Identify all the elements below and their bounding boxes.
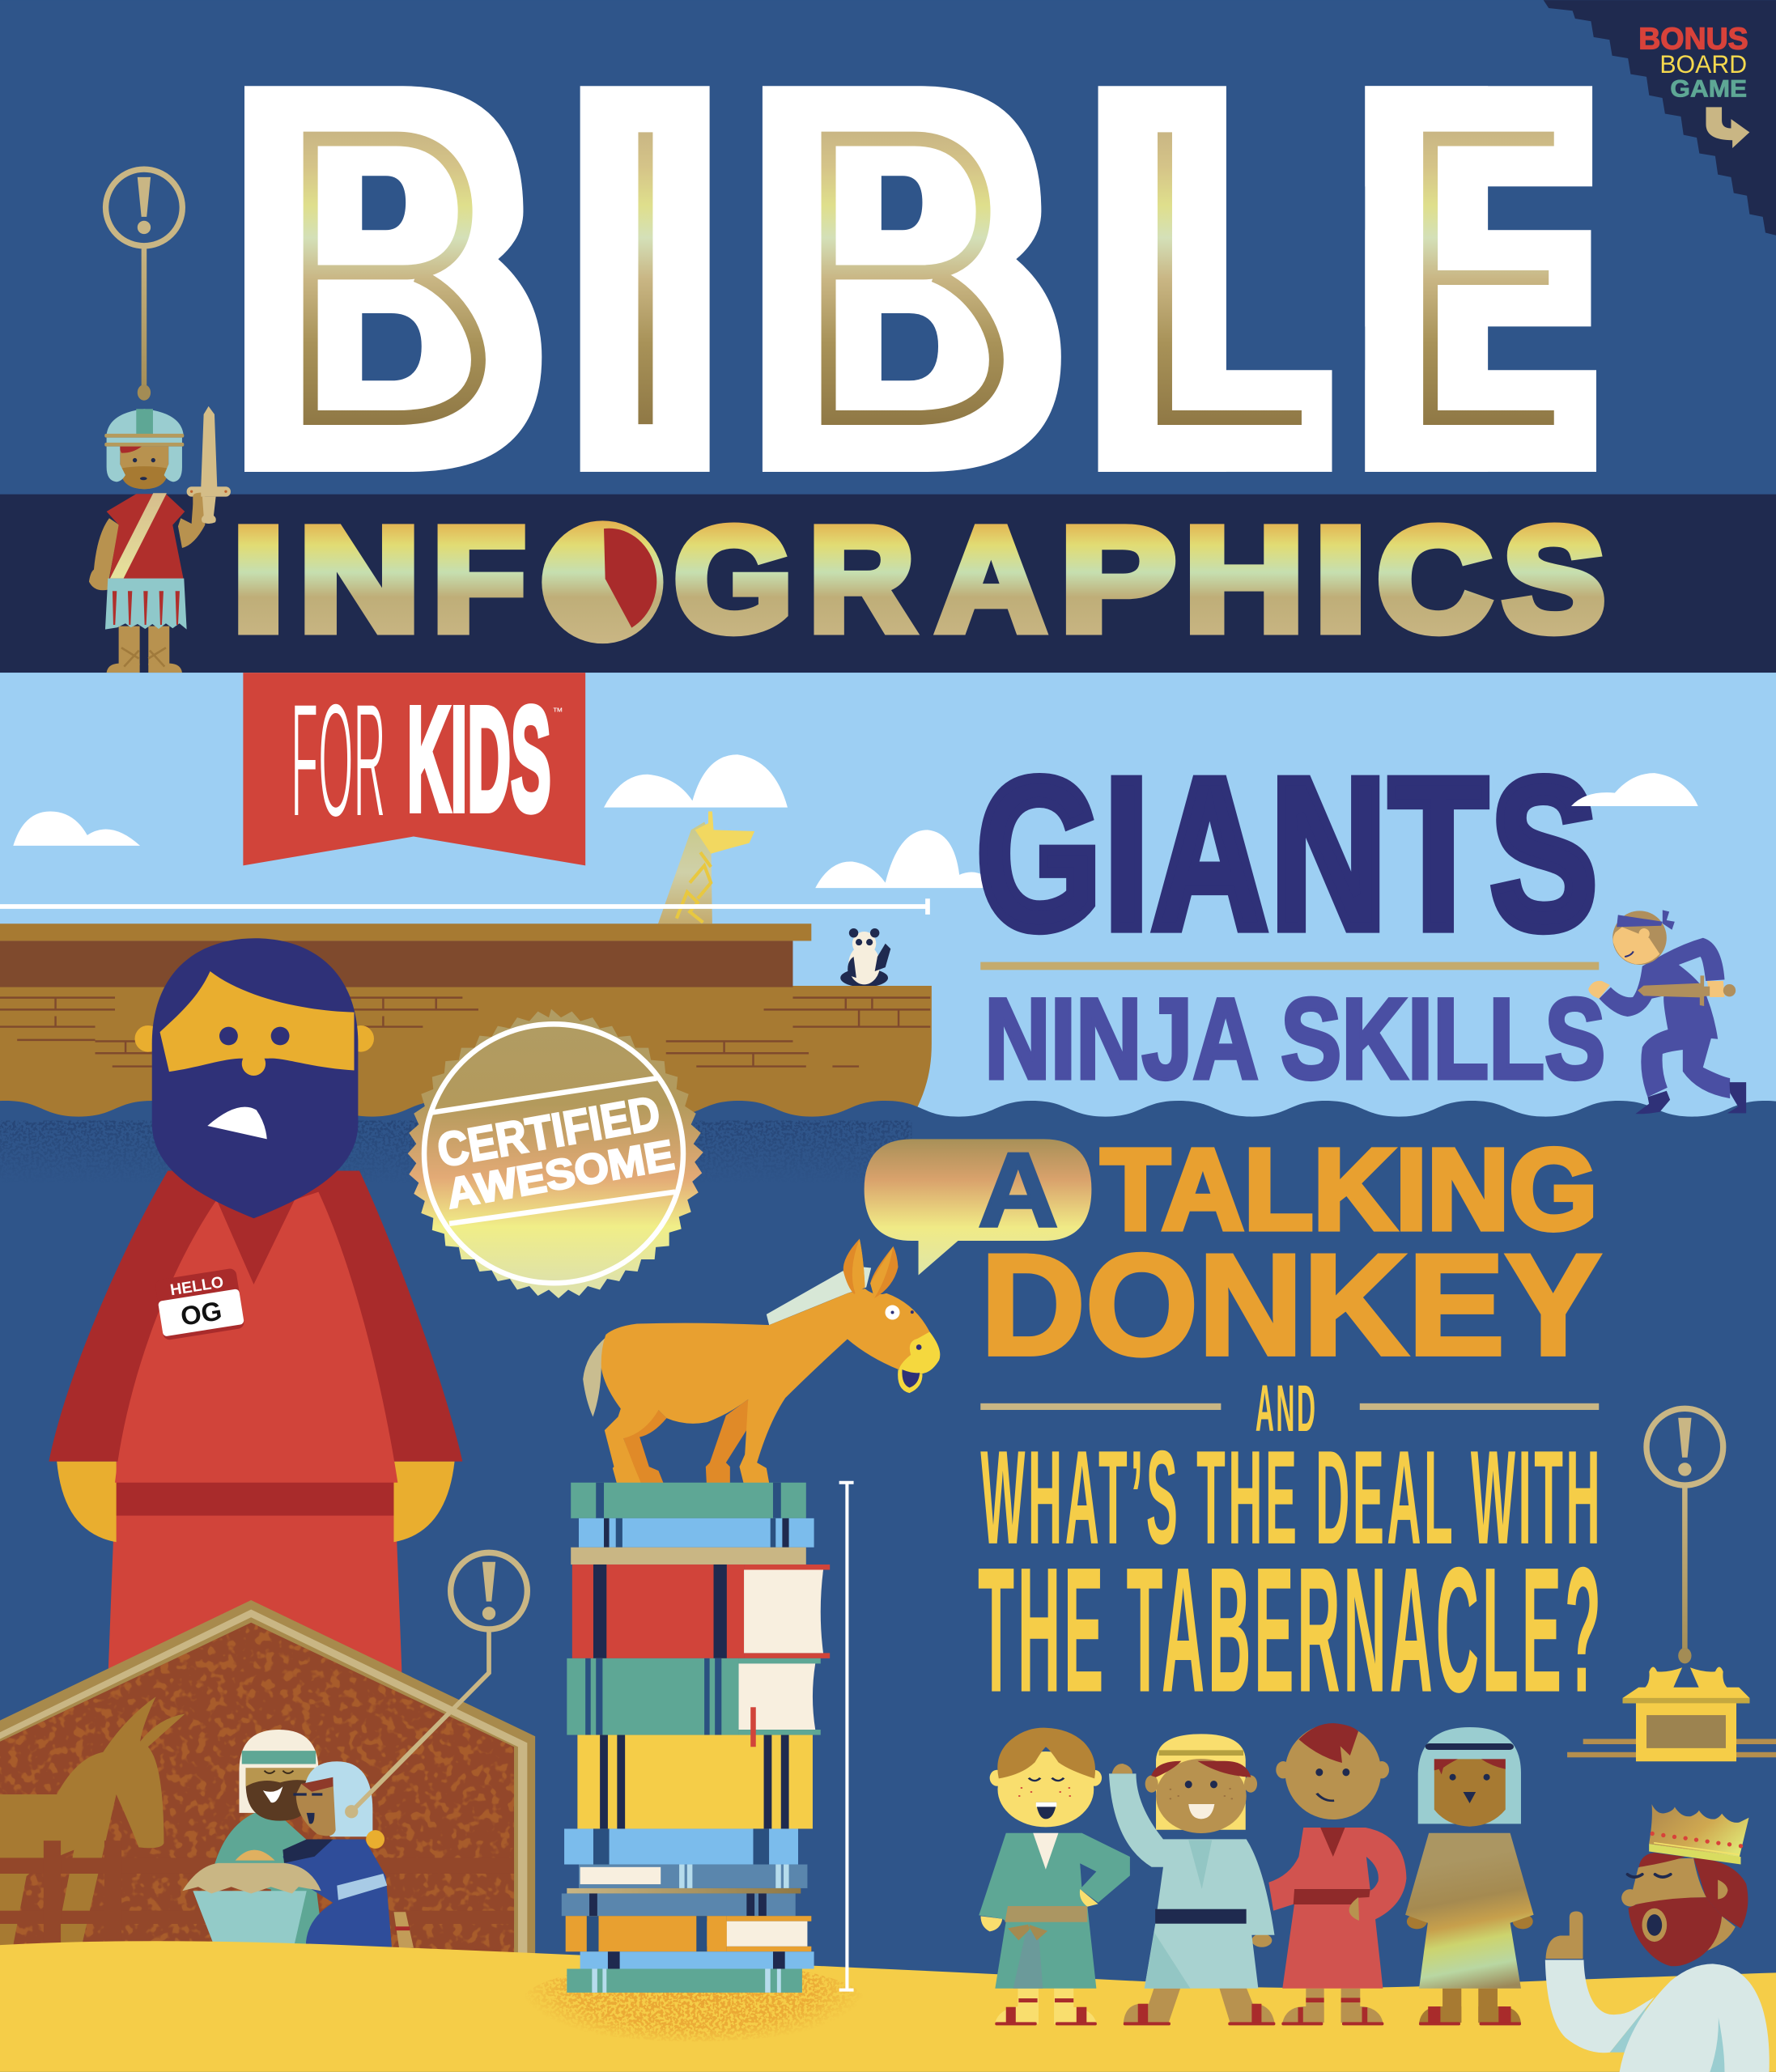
book 7 blue (564, 1828, 798, 1865)
speech bubble with A (865, 1131, 1091, 1275)
fence (0, 1841, 514, 1959)
cloud over giants (1571, 773, 1698, 806)
book 3 tan (571, 1548, 806, 1565)
for kids ribbon: FOR (291, 669, 386, 851)
title: BIBLE: L (1077, 0, 1335, 575)
water (0, 1101, 1776, 2072)
badge: certified awesome (408, 1009, 703, 1298)
icon: exclamation marker middle with pointer (345, 1552, 527, 1818)
sleeves (49, 1171, 462, 1462)
title: INFOGRAPHICS: H (1184, 496, 1304, 662)
book 11 orange (566, 1916, 811, 1951)
corner banner: bonus board game (1544, 0, 1776, 236)
title: INFOGRAPHICS: I (232, 496, 286, 662)
heading: what's the deal with the tabernacle (978, 1423, 1604, 1730)
stable (0, 1600, 535, 1969)
icon: pie chart letter O (542, 520, 663, 643)
panda (840, 928, 890, 987)
heading: talking donkey: DONKEY (980, 1224, 1602, 1385)
gold rule (980, 962, 1599, 970)
corner banner: bonus board game: BONUS (1638, 22, 1748, 56)
speech bubble with A: A (978, 1131, 1059, 1249)
donkey (583, 1239, 940, 1483)
name tag (155, 1267, 245, 1340)
giraffe (658, 811, 754, 923)
beard and hair (152, 938, 358, 1218)
corner banner: bonus board game: GAME (1670, 75, 1747, 102)
king (1545, 1804, 1770, 2072)
robe lower (108, 1462, 402, 1757)
book 10 steel (562, 1893, 796, 1916)
measuring line above ark (0, 898, 928, 915)
kid: gold robe (1405, 1727, 1534, 2025)
kid: red robe (1268, 1723, 1406, 2025)
icon: exclamation marker right (1646, 1408, 1723, 1663)
corner banner: bonus board game: BOARD (1659, 50, 1747, 79)
name tag: OG (179, 1295, 223, 1331)
book 2 blue (579, 1518, 814, 1548)
icon: corner arrow (1706, 107, 1749, 148)
group of four kids (979, 1723, 1534, 2025)
book 5 green (567, 1658, 821, 1735)
title: BIBLE (221, 0, 1603, 575)
donkey silhouette (0, 1696, 185, 1945)
badge: certified awesome: AWESOME (443, 1132, 678, 1218)
for kids ribbon: ™ (552, 705, 563, 717)
book 4 red (572, 1565, 830, 1658)
ark of the covenant (1567, 1667, 1776, 1761)
sand (0, 1941, 1776, 2072)
title: INFOGRAPHICS: P (1060, 496, 1176, 662)
heading: talking donkey: TALKING (1101, 1125, 1598, 1254)
title: INFOGRAPHICS: O (555, 496, 650, 662)
figure: Og the giant (49, 938, 462, 1757)
text: AND (1256, 1372, 1318, 1446)
dark band (0, 495, 1776, 673)
title: INFOGRAPHICS: F (432, 496, 526, 662)
title: INFOGRAPHICS: C (1377, 496, 1492, 662)
book 8 steel (579, 1865, 807, 1888)
title: BIBLE: B (739, 0, 1060, 575)
rules around AND (980, 1403, 1599, 1410)
stack of books (562, 1483, 830, 1993)
book 12 blue (580, 1951, 814, 1969)
title: BIBLE: B (221, 0, 542, 575)
title: INFOGRAPHICS: G (674, 496, 792, 662)
book 6 yellow (577, 1707, 813, 1828)
title: INFOGRAPHICS: A (937, 496, 1046, 662)
mary (304, 1761, 372, 1836)
figure: roman soldier (89, 406, 231, 673)
measuring line beside books (839, 1481, 854, 1991)
heading: ninja skills: NINJA SKILLS (984, 974, 1605, 1103)
book 1 green (571, 1483, 806, 1518)
hands (57, 1462, 455, 1542)
manger (193, 1891, 307, 1949)
title: BIBLE: E (1345, 0, 1603, 575)
joseph (211, 1807, 324, 1947)
kid: green robe (979, 1728, 1130, 2025)
name tag: HELLO (169, 1273, 225, 1299)
kid: waving pale robe (1109, 1734, 1275, 2025)
title: INFOGRAPHICS: I (1314, 496, 1368, 662)
heading: talking donkey (980, 1125, 1602, 1385)
ninja (1588, 910, 1746, 1114)
clouds (13, 754, 997, 888)
for kids ribbon: KIDS (407, 676, 551, 842)
icon: exclamation marker left (106, 169, 182, 401)
title: INFOGRAPHICS: S (1502, 496, 1605, 662)
badge: certified awesome: CERTIFIED (434, 1086, 664, 1178)
book 13 green (567, 1969, 802, 1993)
title: BIBLE: I (536, 0, 752, 575)
ears (135, 1025, 374, 1052)
ark (0, 923, 932, 1123)
title: INFOGRAPHICS: R (809, 496, 915, 662)
sky background (0, 673, 1776, 1128)
title: INFOGRAPHICS (232, 496, 1605, 662)
book 9 tan thin (567, 1888, 801, 1893)
title: INFOGRAPHICS: N (299, 496, 420, 662)
